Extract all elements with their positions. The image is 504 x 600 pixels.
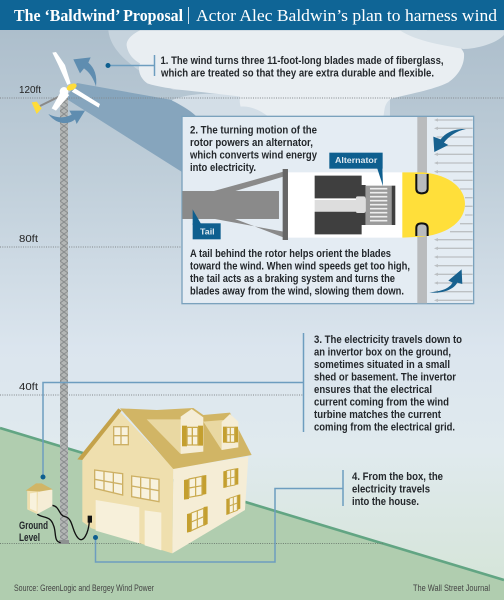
panel 2 text: which converts wind energy [189,150,317,162]
ground [0,428,504,600]
tail label: Tail [200,227,215,236]
panel arrows [429,129,466,293]
height labels: 80ft [19,234,38,245]
cables and plug [37,505,92,543]
title banner: The ‘Baldwind’ Proposal [14,6,183,25]
height marker lines [0,98,504,395]
step 3 text: an invertor box on the ground, [314,346,451,358]
ground level label: Ground [19,520,48,532]
title banner: Actor Alec Baldwin’s plan to harness wind [196,6,498,25]
alternator label [329,153,383,186]
clouds [108,30,504,117]
panel 2 text: rotor powers an alternator, [190,137,313,149]
gable wall [82,410,173,553]
height labels: 40ft [19,382,38,393]
title banner [0,0,504,30]
panel 2 text: toward the wind. When wind speeds get too high, [190,260,410,272]
tail label [193,209,221,239]
step 4 text [352,471,443,508]
housing [285,172,403,238]
step 3 text: 3. The electricity travels down to [314,334,462,346]
step 3 text [314,334,462,434]
dormer right [222,414,238,450]
step 4 text: 4. From the box, the [352,471,443,483]
panel 2 text: into electricity. [190,162,256,174]
panel 2 text: A tail behind the rotor helps orient the blades [190,248,391,260]
blade slots [416,174,428,236]
leader dots [40,63,110,540]
wind lines [434,118,473,302]
rotor blade [417,117,427,303]
garage doors [96,500,139,543]
ground level label [19,520,48,544]
roof [120,408,252,469]
panel 2: alternator [182,116,474,304]
inverter shed [26,483,53,514]
publisher credit: The Wall Street Journal [413,583,490,593]
step 3 text: ensures that the electrical [314,384,432,396]
ground level label: Level [19,532,40,544]
step 3 text: shed or basement. The invertor [314,372,457,384]
wind turbine [32,52,100,124]
step 1 text: which are treated so that they are extra durable and flexible. [160,68,434,80]
light beam from rotor to panel [65,83,205,172]
panel 2 text [189,124,410,298]
dormer left [181,409,203,454]
panel 2 text: blades away from the wind, slowing them down. [190,286,404,298]
source credit: Source: GreenLogic and Bergey Wind Power [14,583,154,593]
step 1 text [160,55,444,80]
side windows [184,468,240,533]
step 3 text: coming from the electrical grid. [314,422,455,434]
yellow nose [402,172,465,238]
right wall [172,457,248,553]
tail boom [182,169,288,240]
rotation arrows [48,57,96,124]
tower [59,97,69,544]
panel 2 text: 2. The turning motion of the [190,124,317,136]
step 3 text: turbine matches the current [314,409,441,421]
step 3 text: sometimes situated in a small [314,359,450,371]
step 1 text: 1. The wind turns three 11-foot-long blades made of fiberglass, [160,55,444,67]
alternator label: Alternator [335,156,377,165]
step 4 text: electricity travels [352,484,430,496]
step 4 text: into the house. [352,496,419,508]
house [77,408,252,553]
step 3 text: current coming from the wind [314,396,449,408]
gable window [114,427,128,445]
front windows [95,470,123,495]
leader lines [43,55,343,562]
alternator body [315,176,395,234]
panel 2 text: the tail acts as a braking system and turns the [190,273,395,285]
height labels [19,85,41,393]
height labels: 120ft [19,85,41,96]
